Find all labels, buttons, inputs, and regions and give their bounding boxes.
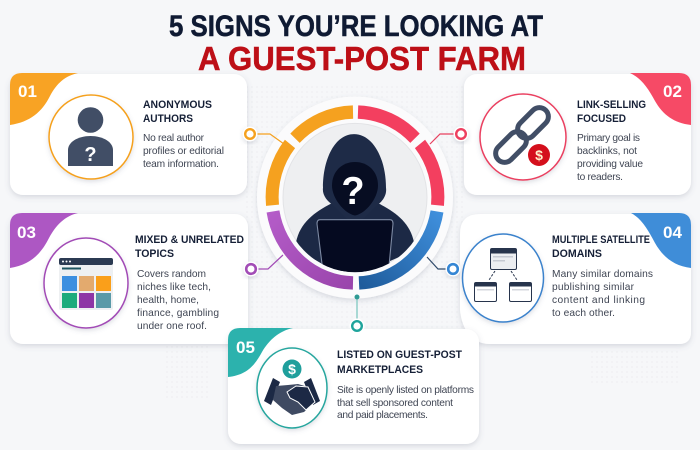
number tab 03: 03 xyxy=(17,223,36,242)
text: 05: that sell sponsored content xyxy=(337,398,453,409)
text: 04: publishing similar xyxy=(552,282,635,293)
text: 02: Primary goal is xyxy=(577,133,640,144)
connector: 05 xyxy=(350,294,364,334)
connector: 01 xyxy=(242,126,284,144)
number tab 03 xyxy=(10,213,78,268)
number tab 02 xyxy=(630,73,691,125)
text: 04: MULTIPLE SATELLITE xyxy=(552,234,650,246)
number tab 01: 01 xyxy=(18,82,37,101)
title xyxy=(169,10,543,77)
icon: hooded figure with laptop: ? xyxy=(341,170,365,213)
icon: handshake and dollar: $ xyxy=(288,361,296,377)
icon: anonymous person: ? xyxy=(84,144,97,166)
text: 03 xyxy=(135,234,244,332)
icon: chain link and dollar xyxy=(480,94,566,180)
text: 02: providing value xyxy=(577,159,643,170)
icon: chain link and dollar: $ xyxy=(535,147,543,163)
central ring xyxy=(257,97,453,298)
title: A GUEST-POST FARM xyxy=(198,40,526,77)
panel: 02 link-selling focused xyxy=(464,73,691,195)
panel: 01 anonymous authors xyxy=(10,73,247,195)
number tab 05: 05 xyxy=(236,338,255,357)
text: 04 xyxy=(552,234,653,319)
ring segment: red xyxy=(358,112,438,205)
text: 04: Many similar domains xyxy=(552,269,653,280)
title: 5 SIGNS YOU’RE LOOKING AT xyxy=(169,10,543,43)
text: 05: and paid placements. xyxy=(337,410,428,421)
icon: handshake and dollar xyxy=(257,348,327,428)
panel: 04 satellite domains xyxy=(460,213,691,344)
text: 02: LINK-SELLING xyxy=(577,99,646,111)
text: 01 xyxy=(143,99,224,170)
icon: browser with colored grid xyxy=(44,238,128,328)
text: 04: content and linking xyxy=(552,295,645,306)
text: 05: LISTED ON GUEST-POST xyxy=(337,349,462,361)
text: 03: under one roof. xyxy=(137,321,207,332)
text: 02: FOCUSED xyxy=(577,113,626,125)
text: 02: to readers. xyxy=(577,172,623,183)
ring segment: blue xyxy=(359,211,437,283)
text: 03: health, home, xyxy=(137,295,199,306)
number tab 04: 04 xyxy=(663,223,682,242)
icon: anonymous person xyxy=(49,95,133,179)
text: 05 xyxy=(337,349,474,421)
text: 05: MARKETPLACES xyxy=(337,364,423,376)
ring segment: purple xyxy=(273,211,353,283)
icon: hooded figure with laptop xyxy=(296,134,414,274)
number tab 05 xyxy=(228,328,293,377)
text: 02: backlinks, not xyxy=(577,146,637,157)
text: 03: finance, gambling xyxy=(137,308,219,319)
connector: 04 xyxy=(427,257,460,276)
text: 03: Covers random xyxy=(137,269,206,280)
text: 03: MIXED & UNRELATED xyxy=(135,234,244,246)
text: 01: profiles or editorial xyxy=(143,146,224,157)
icon: linked browser windows xyxy=(462,234,544,322)
ring segment: orange xyxy=(272,112,353,205)
connector: 03 xyxy=(244,255,283,276)
panel: 05 marketplaces xyxy=(228,328,479,444)
text: 03: niches like tech, xyxy=(137,282,211,293)
text: 01: No real author xyxy=(143,133,205,144)
number tab 02: 02 xyxy=(663,82,682,101)
text: 04: to each other. xyxy=(552,308,615,319)
text: 02 xyxy=(577,99,646,183)
panel: 03 mixed topics xyxy=(10,213,248,344)
connector: 02 xyxy=(430,126,468,144)
number tab 04 xyxy=(631,213,691,268)
text: 04: DOMAINS xyxy=(552,248,602,260)
text: 03: TOPICS xyxy=(135,248,174,260)
text: 01: team information. xyxy=(143,159,219,170)
text: 01: ANONYMOUS xyxy=(143,99,212,111)
text: 01: AUTHORS xyxy=(143,113,193,125)
number tab 01 xyxy=(10,73,78,125)
text: 05: Site is openly listed on platforms xyxy=(337,385,474,396)
